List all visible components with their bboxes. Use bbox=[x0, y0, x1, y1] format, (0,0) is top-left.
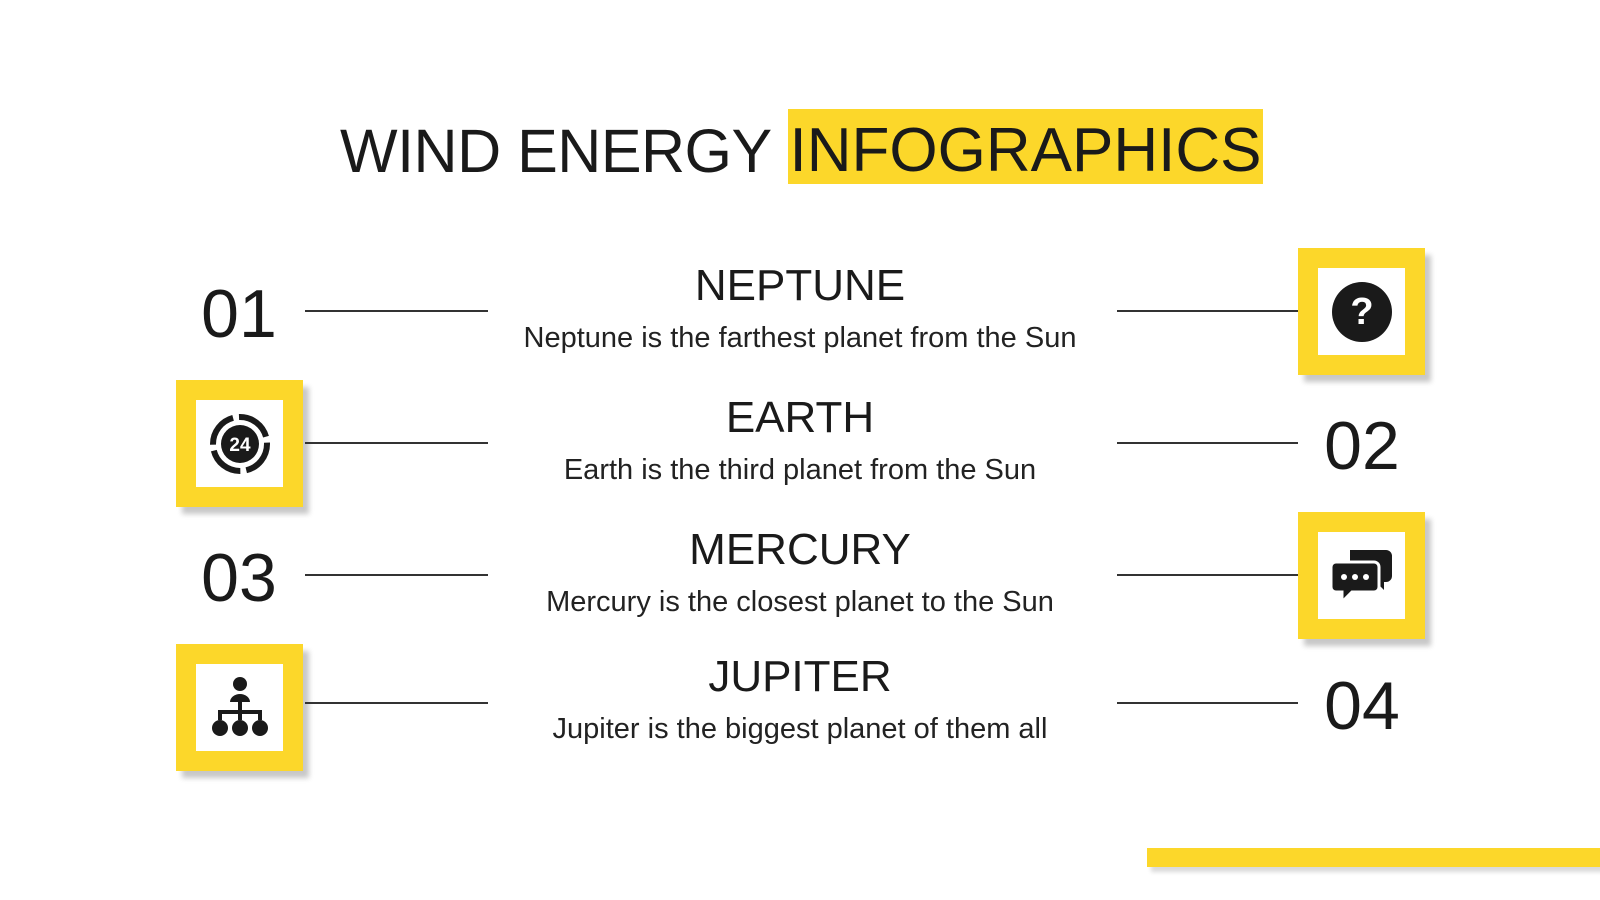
description: Mercury is the closest planet to the Sun bbox=[546, 586, 1054, 618]
title text: WIND ENERGY bbox=[340, 117, 772, 185]
heading: NEPTUNE bbox=[695, 261, 905, 310]
title highlight bbox=[788, 109, 1263, 184]
description: Earth is the third planet from the Sun bbox=[564, 454, 1036, 486]
row 1: neptune bbox=[201, 248, 1434, 384]
description: Neptune is the farthest planet from the Sun bbox=[524, 322, 1076, 354]
title highlighted word: INFOGRAPHICS bbox=[790, 116, 1261, 185]
icon: 24 hours: 24 bbox=[229, 434, 250, 456]
icon: chat bbox=[1298, 512, 1425, 639]
number 01: 01 bbox=[201, 276, 277, 352]
heading: JUPITER bbox=[708, 652, 892, 701]
number 04: 04 bbox=[1324, 668, 1400, 744]
title bbox=[340, 109, 1263, 185]
row 2: earth bbox=[176, 380, 1400, 516]
heading: EARTH bbox=[726, 393, 874, 442]
row 4: jupiter bbox=[176, 644, 1400, 780]
icon: hierarchy bbox=[176, 644, 303, 771]
icon: question: ? bbox=[1350, 290, 1373, 332]
row 3: mercury bbox=[201, 512, 1434, 648]
description: Jupiter is the biggest planet of them all bbox=[553, 713, 1047, 745]
heading: MERCURY bbox=[689, 525, 911, 574]
number 03: 03 bbox=[201, 540, 277, 616]
icon: 24 hours bbox=[176, 380, 303, 507]
number 02: 02 bbox=[1324, 408, 1400, 484]
bottom accent bar bbox=[1147, 848, 1600, 867]
icon: question bbox=[1298, 248, 1425, 375]
